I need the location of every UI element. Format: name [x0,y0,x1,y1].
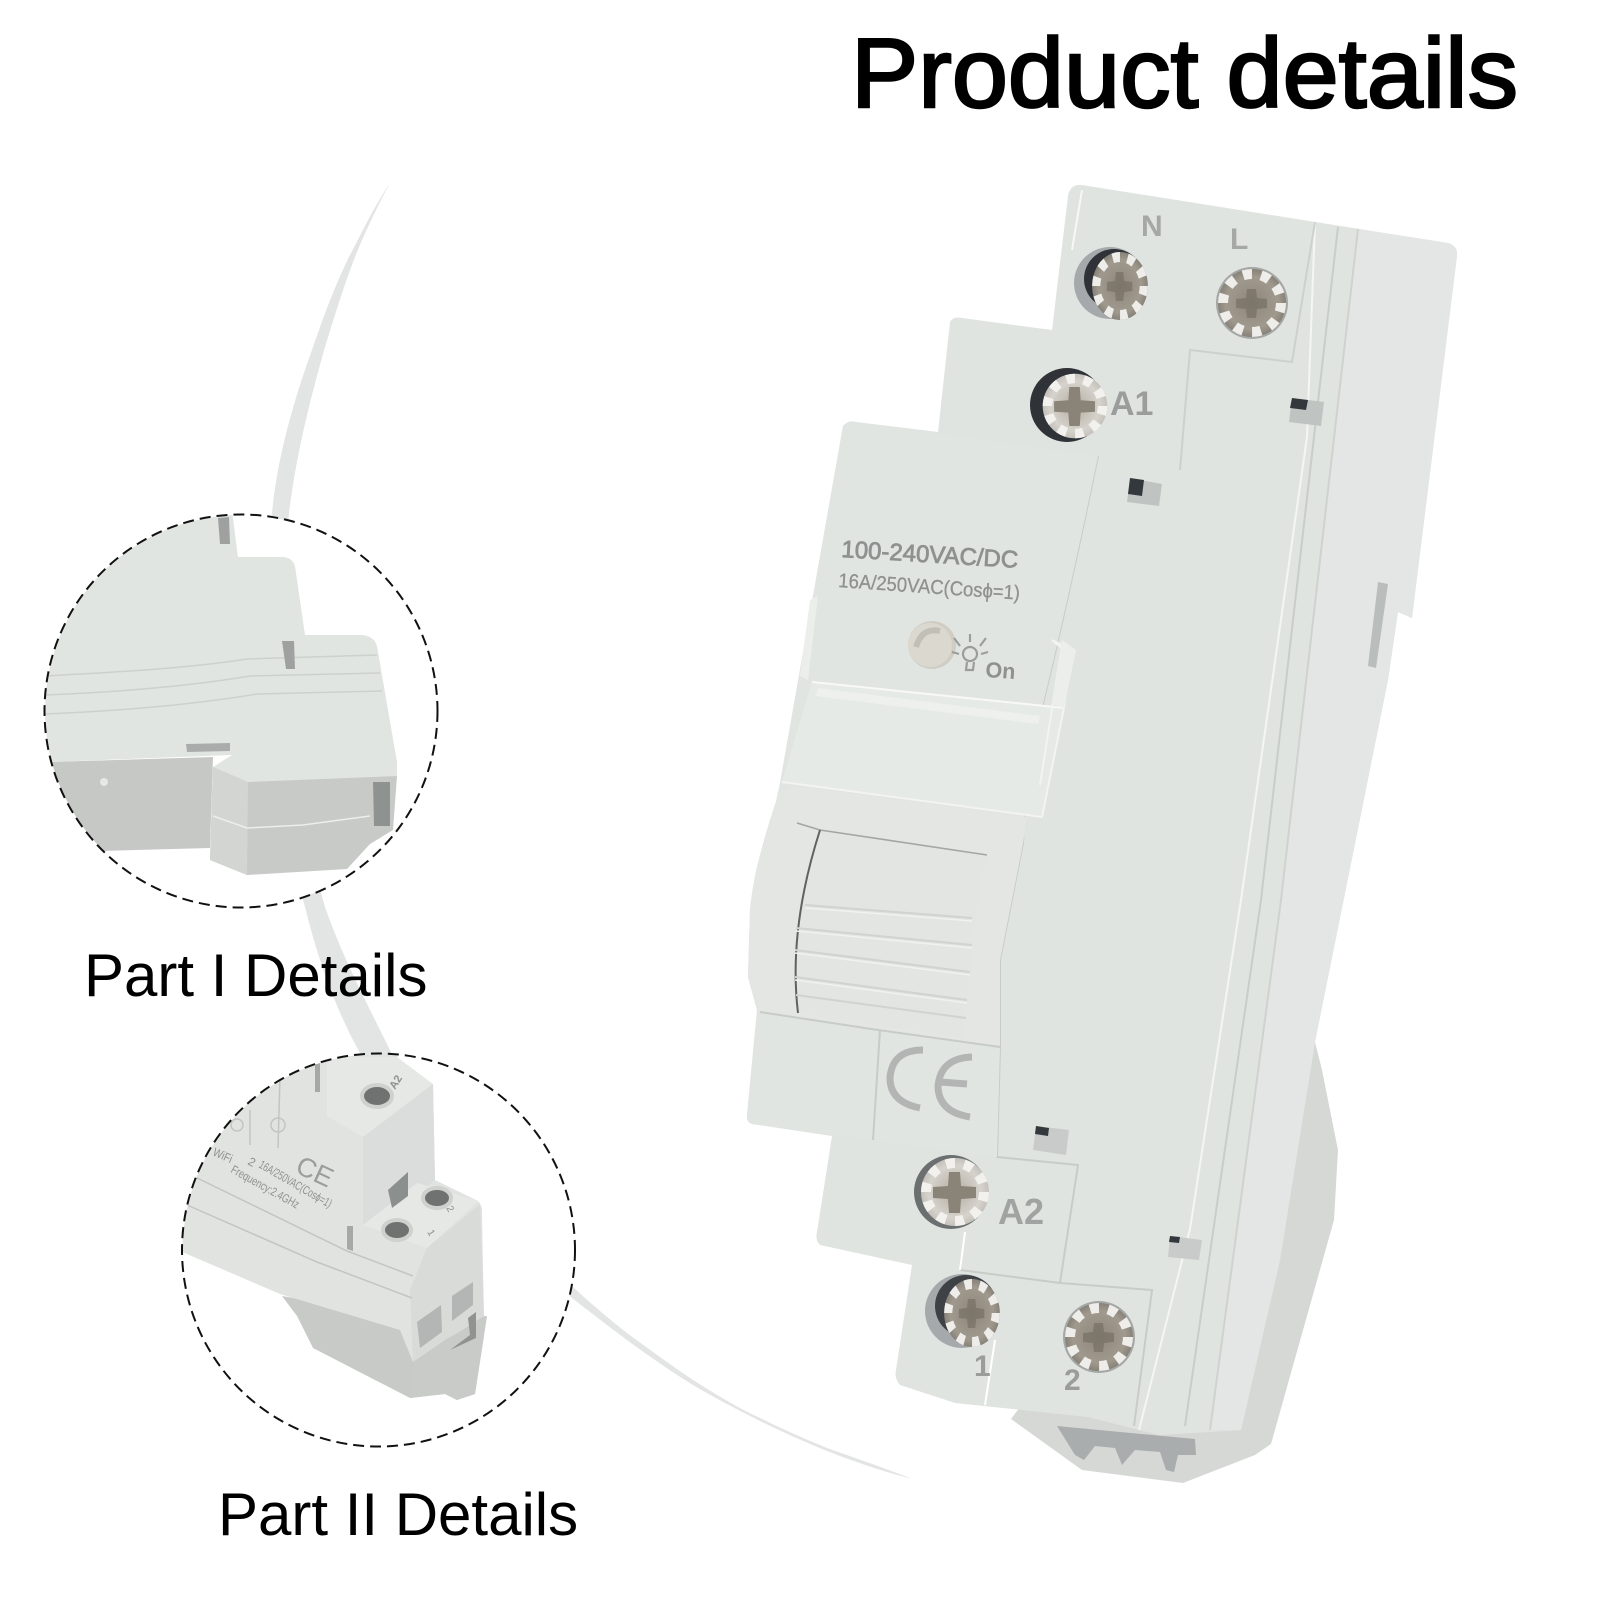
voltage rating: 100-240VAC/DC [841,536,1019,574]
small printed text: 1 [424,1228,437,1239]
mounting holes [1033,398,1324,1260]
device body silhouette [747,185,1457,1435]
inset photo [180,1040,487,1400]
device markings [838,210,1248,1397]
terminal screws [914,247,1288,1373]
wheel / rocker [748,787,1027,1047]
small printed text: WiFi [211,1145,235,1166]
title: Product details [851,18,1518,128]
terminal A1: A1 [1110,385,1153,423]
small printed text: CE [291,1150,338,1193]
terminal 2: 2 [1064,1364,1081,1397]
label: Part II Details: Part II Details [218,1481,578,1548]
small printed text: Frequency:2.4GHz [229,1162,302,1211]
small printed text: 2 [443,1204,456,1215]
product photo: relay module [747,185,1457,1483]
current rating: 16A/250VAC(Cosϕ=1) [838,570,1021,605]
front cover panel [747,422,1098,1157]
terminal A2: A2 [998,1191,1044,1232]
background swoosh arc [267,183,912,1479]
clip recess [1057,1426,1196,1472]
transparent window [782,596,1076,817]
body side lines [960,190,1358,1430]
dashed circle [44,514,438,908]
inset photo [30,510,397,875]
dashed circle [182,1054,575,1446]
terminal L: L [1230,223,1248,256]
terminal 1: 1 [974,1350,991,1383]
rail clip slit [1368,582,1388,668]
inset: Part II detail [180,1040,575,1446]
lower DIN rail clip [1011,1042,1338,1483]
small printed text [211,1073,456,1239]
label: Part I Details: Part I Details [84,942,427,1009]
inset: Part I detail [30,510,438,908]
small printed text: A2 [387,1073,405,1092]
small printed text: 16A/250VAC(Cosϕ=1) [256,1157,335,1211]
On label: On [985,657,1016,684]
lower cover seam and CE mark [760,1012,1000,1140]
indicator LED [908,621,956,669]
lamp icon [952,634,988,670]
right side band [1210,229,1457,1430]
terminal N: N [1141,210,1163,243]
small printed text: 2 [246,1154,258,1170]
